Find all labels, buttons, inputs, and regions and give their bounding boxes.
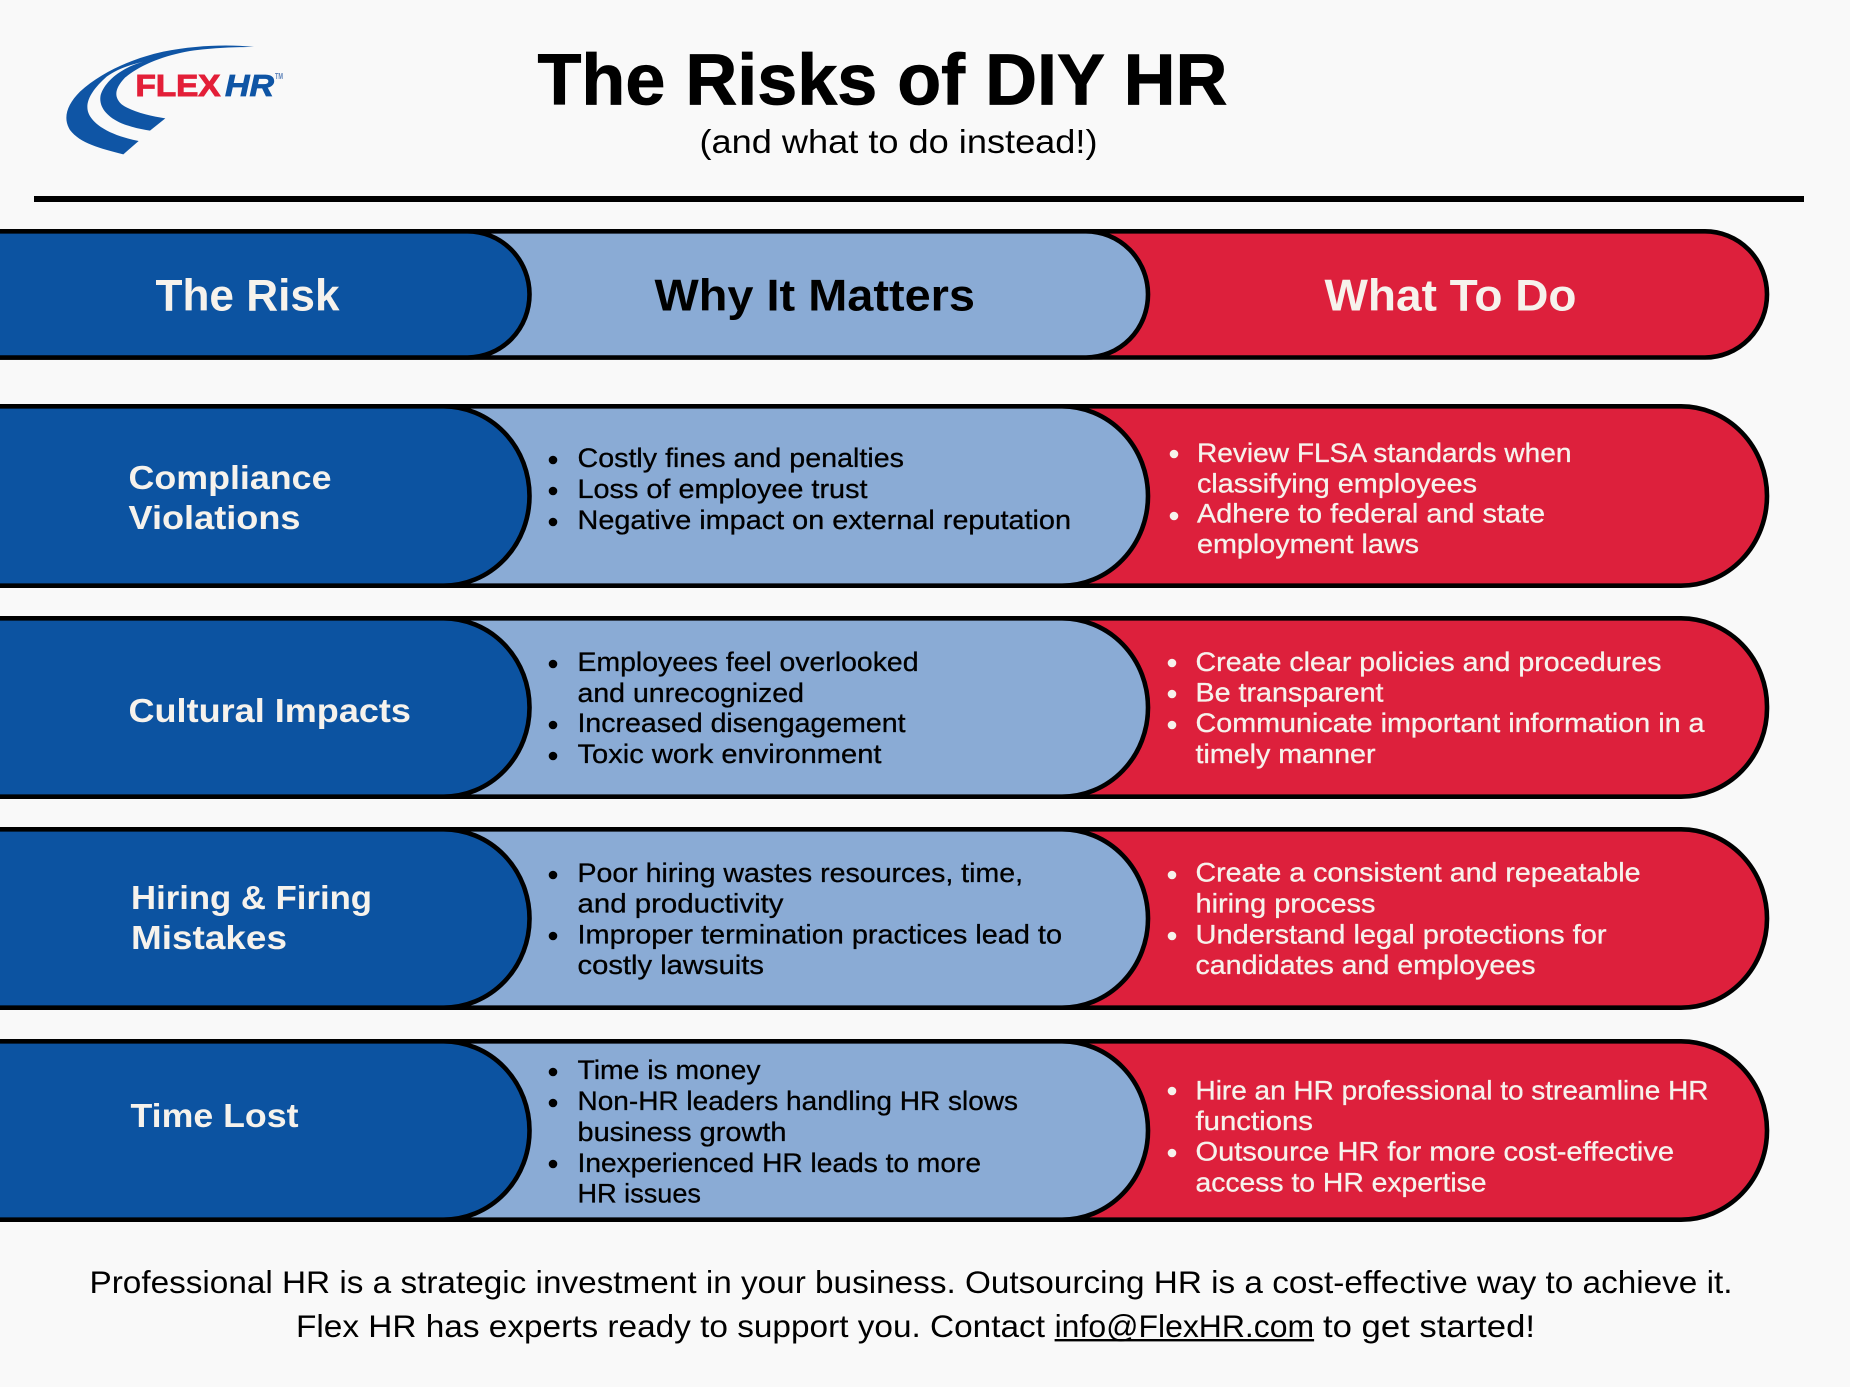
what to do: culture: Communicate important information in a xyxy=(1196,708,1705,738)
why it matters: time xyxy=(0,1041,1148,1220)
footer text: info@FlexHR.com xyxy=(1055,1308,1314,1344)
what to do: culture xyxy=(0,618,1767,797)
why it matters: culture: and unrecognized xyxy=(578,678,804,708)
what to do: time: Hire an HR professional to streamline HR xyxy=(1196,1076,1708,1106)
risk: culture: Cultural Impacts xyxy=(128,693,411,730)
why it matters: compliance: Negative impact on external reputation xyxy=(578,505,1071,535)
why it matters: hiring: and productivity xyxy=(578,888,784,918)
risk: hiring: Mistakes xyxy=(131,920,287,957)
what to do: hiring: hiring process xyxy=(1196,888,1376,918)
header pill: What To Do: What To Do xyxy=(1324,272,1576,320)
why it matters: hiring: costly lawsuits xyxy=(578,950,764,980)
logo wordmark HR: HR xyxy=(225,68,275,103)
why it matters: compliance xyxy=(0,406,1148,586)
footer text: Flex HR has experts ready to support you. Contact xyxy=(296,1308,1045,1344)
what to do: time xyxy=(0,1041,1767,1220)
header pill: Why It Matters xyxy=(0,231,1148,358)
why it matters: time: business growth xyxy=(578,1117,786,1147)
footer text xyxy=(90,1264,1733,1344)
risk: hiring xyxy=(0,829,530,1008)
what to do: time: access to HR expertise xyxy=(1196,1168,1486,1198)
risk: compliance: Violations xyxy=(128,500,300,537)
header pill: The Risk: The Risk xyxy=(156,272,340,320)
why it matters: culture: Toxic work environment xyxy=(578,739,882,769)
what to do: compliance: employment laws xyxy=(1197,529,1419,559)
why it matters: culture: Increased disengagement xyxy=(578,708,906,738)
what to do: hiring: Understand legal protections for xyxy=(1196,920,1607,950)
why it matters: hiring: Poor hiring wastes resources, time, xyxy=(578,858,1023,888)
logo wordmark FLEX: FLEX xyxy=(136,68,221,103)
risk: time: Time Lost xyxy=(130,1098,298,1135)
what to do: compliance xyxy=(0,406,1767,586)
panel: row Hiring and Firing Mistakes xyxy=(0,829,1767,1008)
what to do: culture: timely manner xyxy=(1196,739,1376,769)
risk: time xyxy=(0,1041,530,1220)
risk: hiring: Hiring & Firing xyxy=(131,880,372,917)
why it matters: time: Time is money xyxy=(578,1055,761,1085)
why it matters: hiring xyxy=(0,829,1148,1008)
what to do: compliance: Review FLSA standards when xyxy=(1197,438,1572,468)
header pill: Why It Matters: Why It Matters xyxy=(654,272,975,320)
why it matters: time: Non-HR leaders handling HR slows xyxy=(578,1086,1018,1116)
what to do: hiring xyxy=(0,829,1767,1008)
panel: column header row xyxy=(0,231,1767,358)
logo swoosh xyxy=(66,46,254,154)
risk: compliance xyxy=(0,406,530,586)
why it matters: hiring: Improper termination practices lead to xyxy=(578,920,1062,950)
what to do: culture: Be transparent xyxy=(1196,678,1384,708)
why it matters: time: HR issues xyxy=(578,1178,701,1208)
what to do: hiring: Create a consistent and repeatable xyxy=(1196,858,1640,888)
header pill: The Risk xyxy=(0,231,530,358)
what to do: compliance: classifying employees xyxy=(1197,468,1477,498)
what to do: hiring: candidates and employees xyxy=(1196,950,1536,980)
why it matters: compliance: Loss of employee trust xyxy=(578,474,868,504)
why it matters: culture: Employees feel overlooked xyxy=(578,647,918,677)
why it matters: time: Inexperienced HR leads to more xyxy=(578,1148,981,1178)
logo trademark: TM xyxy=(275,72,283,81)
what to do: culture: Create clear policies and procedures xyxy=(1196,647,1662,677)
panel: row Time Lost xyxy=(0,1041,1767,1220)
what to do: time: functions xyxy=(1196,1106,1313,1136)
risk: compliance: Compliance xyxy=(128,460,332,497)
why it matters: compliance: Costly fines and penalties xyxy=(578,443,904,473)
footer text: Professional HR is a strategic investment in your business. Outsourcing HR is a cost-effective way to achieve it. xyxy=(90,1264,1733,1300)
footer text: to get started! xyxy=(1323,1308,1535,1344)
header pill: What To Do xyxy=(0,231,1767,358)
logo: Flex HR xyxy=(66,46,283,154)
risk: culture xyxy=(0,618,530,797)
why it matters: culture xyxy=(0,618,1148,797)
panel: row Compliance Violations xyxy=(0,406,1767,586)
subtitle: (and what to do instead!) xyxy=(700,124,1098,161)
panel: row Cultural Impacts xyxy=(0,618,1767,797)
what to do: compliance: Adhere to federal and state xyxy=(1197,498,1545,528)
title: The Risks of DIY HR xyxy=(538,40,1228,120)
what to do: time: Outsource HR for more cost-effective xyxy=(1196,1136,1674,1166)
